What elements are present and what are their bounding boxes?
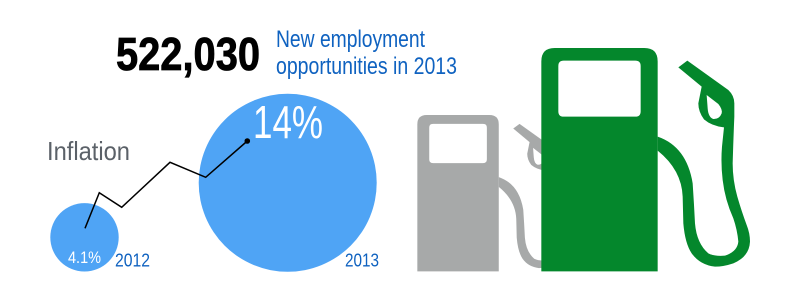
headline number: 522,030: [116, 28, 260, 80]
year 2012: 2012: [115, 250, 150, 270]
employment caption: New employment: [276, 26, 425, 53]
circle 2013: [199, 94, 377, 272]
value 4.1%: 4.1%: [68, 248, 101, 267]
circle 2012: [50, 203, 119, 272]
icon: large green pump: [541, 48, 750, 271]
value 14%: 14%: [253, 96, 323, 148]
inflation label: Inflation: [47, 136, 130, 166]
employment caption: opportunities in 2013: [276, 53, 457, 80]
employment caption: [276, 26, 457, 80]
year 2013: 2013: [345, 250, 379, 270]
icon: small gray pump: [417, 115, 563, 271]
inflation line: [85, 138, 250, 228]
